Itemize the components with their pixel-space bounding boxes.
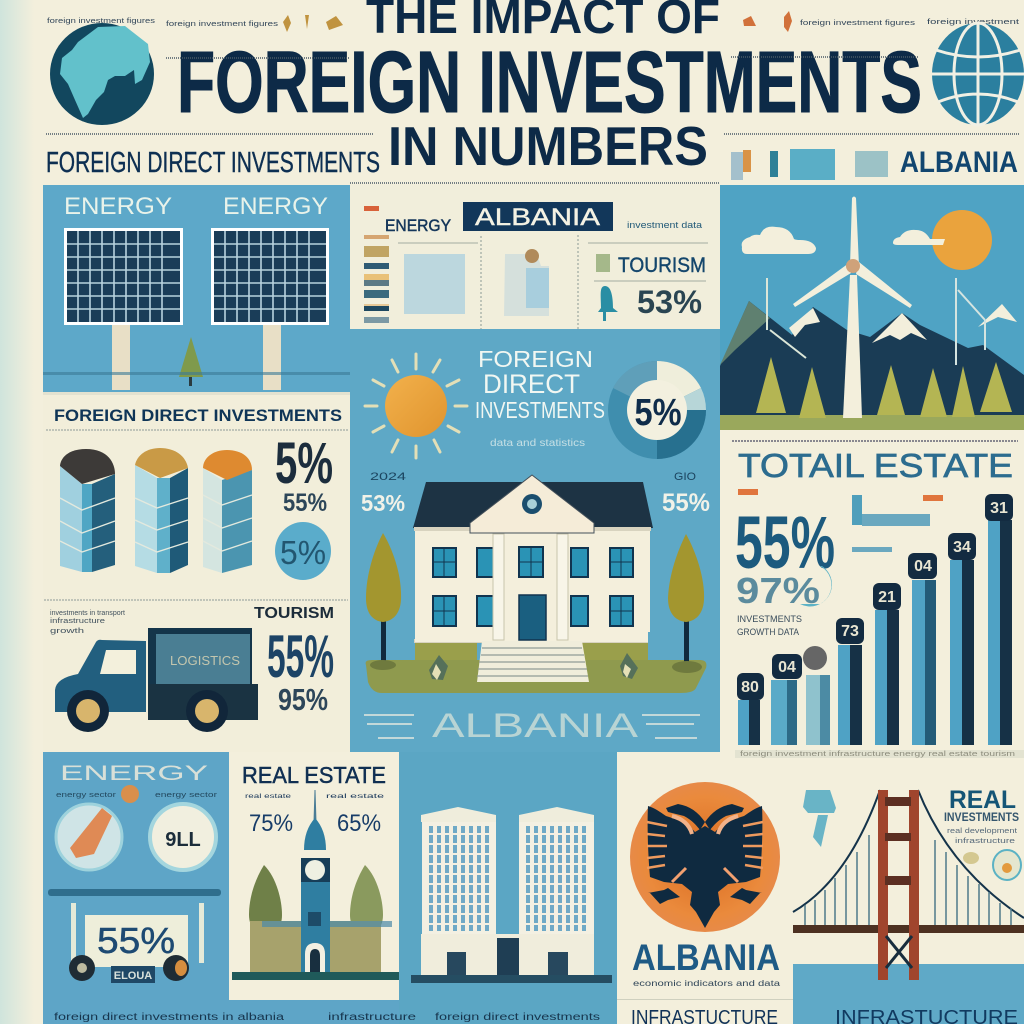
- panel: real estate bar chart: [720, 430, 1024, 752]
- caption: [737, 614, 802, 637]
- machine with 55%: 55%: [97, 920, 175, 961]
- clock tower: [301, 790, 330, 972]
- centre small stats: 55%: [662, 489, 710, 517]
- panel: energy gauges: [43, 752, 229, 1024]
- icon: earth globe: [50, 23, 154, 125]
- bar chart: [737, 494, 1013, 745]
- mountains: [720, 301, 1024, 416]
- heading: foreign direct investments: INVESTMENTS: [475, 397, 605, 423]
- legend: [852, 495, 862, 525]
- small labels: [245, 793, 385, 800]
- bridge panel header strip: foreign investment infrastructure energy real estate tourism: [740, 751, 1015, 758]
- trees: [249, 865, 282, 933]
- panel: energy solar: [43, 185, 350, 392]
- bottom captions: foreign direct investments in albania: [54, 1012, 285, 1023]
- small text: economic indicators and data: [633, 979, 781, 988]
- panel: bridge: [793, 752, 1024, 1024]
- columns: [493, 534, 504, 640]
- bridge panel header strip: [735, 750, 1024, 758]
- icon: truck: [55, 628, 258, 732]
- main wind turbine: [793, 196, 912, 418]
- pediment: [470, 475, 594, 533]
- panel: albania flag: [617, 752, 793, 1024]
- tourism percent: 53%: [637, 284, 702, 320]
- windows: [433, 547, 633, 626]
- panel: energy gauges: energy sector: [155, 792, 218, 799]
- icon: truck: LOGISTICS: [170, 653, 240, 668]
- stat 75%: 75%: [249, 810, 293, 837]
- building left: [421, 807, 496, 937]
- stat 55% large: 55%: [267, 623, 334, 690]
- caption: GROWTH DATA: [737, 627, 799, 637]
- header small text: foreign investment: [927, 19, 1019, 26]
- clouds: [742, 227, 816, 254]
- icon: wireframe globe: [932, 23, 1024, 125]
- panel: energy gauges: energy sector: [56, 792, 117, 799]
- tourism label: TOURISM: [254, 605, 334, 622]
- real label: REAL: [949, 786, 1016, 814]
- bottom captions: infrastructure: [328, 1012, 417, 1023]
- header small text: foreign investment figures: [47, 18, 156, 25]
- panel: foreign direct investments cylinders: [43, 392, 350, 752]
- icon: small tree: [179, 337, 203, 377]
- striped legend: [364, 206, 389, 323]
- donut label: 5%: [634, 392, 682, 434]
- icon: small badges: [963, 852, 979, 864]
- small text: growth: [50, 628, 84, 635]
- albania banner: [463, 202, 613, 231]
- bar labels: [741, 500, 1008, 696]
- heading: foreign direct investments: DIRECT: [483, 369, 580, 399]
- panel: albania overview: investment data: [627, 220, 702, 230]
- building: main: [413, 475, 653, 660]
- ground: [720, 415, 1024, 430]
- machine with 55%: [69, 903, 204, 983]
- small labels: real estate: [326, 793, 385, 800]
- tree right: [668, 534, 704, 673]
- bar labels: 73: [841, 623, 859, 640]
- small text: [50, 610, 125, 635]
- door: [519, 595, 546, 640]
- header small text: [47, 18, 1019, 28]
- energy label: ENERGY: [385, 216, 451, 235]
- bar labels: 04: [778, 659, 796, 676]
- panel: real estate tower: [229, 752, 399, 1000]
- flag circle: [630, 782, 780, 932]
- heading: FOREIGN DIRECT INVESTMENTS: [54, 406, 342, 425]
- bar labels: 34: [953, 539, 971, 556]
- bar labels: 80: [741, 679, 759, 696]
- building right: [519, 807, 594, 937]
- stat 55%: 55%: [283, 489, 327, 517]
- header small text: foreign investment figures: [800, 20, 916, 27]
- header: title block: [46, 0, 1020, 183]
- bottom captions: foreign direct investments: [435, 1012, 600, 1023]
- bubble 5%: [275, 522, 331, 580]
- stat 55%: 55%: [735, 501, 835, 584]
- church wings: [250, 921, 301, 972]
- icon: sun: [365, 354, 467, 458]
- machine with 55%: ELOUA: [114, 970, 152, 982]
- tree left: [366, 533, 401, 670]
- panel strip below real estate: [229, 1000, 399, 1024]
- cylinder 1: [60, 449, 115, 572]
- sun: [932, 210, 992, 270]
- bar labels: 31: [990, 500, 1008, 517]
- faded image placeholder centre: [504, 254, 549, 316]
- small labels: real estate: [245, 793, 292, 800]
- icon: dish: [803, 790, 836, 847]
- centre small stats: 2024: [370, 471, 406, 483]
- cylinder 2: [135, 448, 188, 573]
- panel: twin buildings: [399, 752, 617, 1024]
- bar labels: 04: [914, 558, 932, 575]
- stat 97%: 97%: [736, 570, 820, 611]
- subtitle left: FOREIGN DIRECT INVESTMENTS: [46, 147, 380, 179]
- icon: tourism pin: [598, 286, 618, 321]
- title line 3: IN NUMBERS: [388, 115, 708, 177]
- energy heading right: ENERGY: [223, 193, 328, 220]
- centre small stats: GIO: [674, 471, 696, 483]
- heading: REAL ESTATE: [242, 762, 386, 788]
- gauge right: [150, 804, 216, 870]
- icon: solar panel left: [64, 228, 183, 390]
- header small text: foreign investment figures: [166, 21, 279, 28]
- panel: wind and mountains: [720, 185, 1024, 430]
- donut chart 5%: [608, 361, 706, 459]
- small text: infrastructure: [50, 618, 105, 625]
- small text: investments in transport: [50, 610, 125, 617]
- distant turbine left: [767, 278, 806, 358]
- steps: [477, 641, 589, 682]
- centre small stats: [361, 471, 710, 517]
- heading: TOTAIL ESTATE: [738, 447, 1013, 484]
- caption: INVESTMENTS: [737, 614, 802, 624]
- stat 5% large: 5%: [275, 431, 333, 496]
- podium: [421, 934, 594, 976]
- albania banner text: ALBANIA: [475, 204, 600, 231]
- stat 95%: 95%: [278, 682, 328, 717]
- gauge right: 9LL: [165, 829, 201, 851]
- double headed eagle: [647, 804, 763, 928]
- heading: ENERGY: [60, 762, 208, 785]
- heading: foreign direct investments: FOREIGN: [478, 346, 593, 372]
- heading: foreign direct investments: data and statistics: [490, 438, 585, 449]
- tourism label: TOURISM: [618, 254, 706, 277]
- cylinder 3: [203, 450, 252, 573]
- bar labels: 21: [878, 589, 896, 606]
- trees: [756, 357, 1012, 418]
- heading: foreign direct investments: [475, 346, 605, 449]
- panel: bridge: real development: [947, 828, 1017, 835]
- gauge left: [56, 804, 122, 870]
- centre small stats: 53%: [361, 490, 405, 516]
- shrubs: [429, 653, 638, 680]
- bottom captions: [54, 1012, 600, 1023]
- icon: solar panel right: [211, 228, 329, 390]
- energy heading left: ENERGY: [64, 193, 172, 220]
- panel: bridge: infrastructure: [955, 838, 1015, 845]
- panel: centre blue: [350, 329, 720, 752]
- faded caption: albania: ALBANIA: [432, 707, 638, 745]
- ground: [366, 660, 706, 693]
- panel: albania overview: [350, 185, 720, 332]
- stat 65%: 65%: [337, 810, 381, 837]
- distant turbine right: [956, 278, 985, 365]
- bridge: [793, 790, 1024, 980]
- bubble 5%: 5%: [280, 534, 326, 571]
- heading: ALBANIA: [632, 937, 780, 978]
- faded image placeholder left: [404, 254, 465, 314]
